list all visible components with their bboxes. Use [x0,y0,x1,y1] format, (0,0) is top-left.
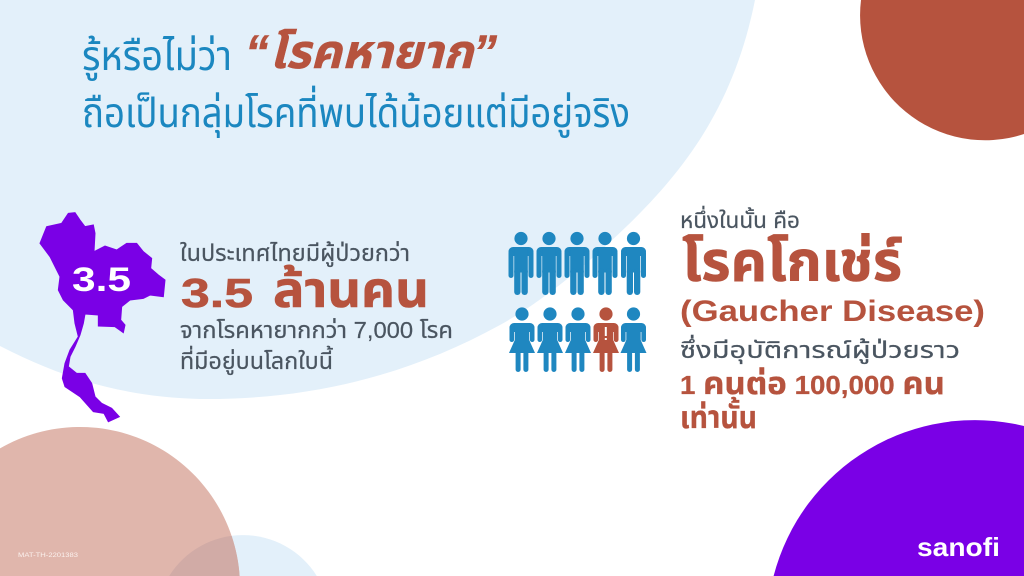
background: purple circle bottom right [774,420,1024,576]
background: pink circle bottom left [0,427,240,576]
text block: Thailand patients: ล้านคน [273,262,429,318]
text block: Gaucher disease: (Gaucher Disease) [680,295,985,328]
text block: Gaucher disease: 1 คนต่อ 100,000 คน [680,366,945,401]
text block: Thailand patients [180,240,453,376]
icon group: people [508,232,646,372]
background: brown circle top right [860,0,1024,140]
text block: Thailand patients: จากโรคหายากกว่า 7,000 โรค [180,317,453,343]
text block: Gaucher disease: เท่านั้น [680,396,757,435]
title line 1: “โรคหายาก” [245,25,498,78]
background: overlap of pink and blue circles [170,536,240,576]
material code: MAT-TH-2201383 [18,552,78,559]
title line 1 [82,25,498,81]
text block: Gaucher disease [680,205,985,435]
text block: Gaucher disease: ซึ่งมีอุบัติการณ์ผู้ป่วยราว [680,334,960,365]
background: large light blue shape [0,0,755,399]
text block: Thailand patients: ในประเทศไทยมีผู้ป่วยกว่า [180,240,410,268]
text block: Thailand patients: ที่มีอยู่บนโลกใบนี้ [180,345,333,376]
title line 1: รู้หรือไม่ว่า [82,33,232,81]
text block: Gaucher disease: โรคโกเช่ร์ [682,230,902,293]
text block: Gaucher disease: หนึ่งในนั้น คือ [680,205,800,233]
background: small light blue circle bottom [169,535,317,576]
title line 2: ถือเป็นกลุ่มโรคที่พบได้น้อยแต่มีอยู่จริง [82,85,630,138]
map of Thailand with figure [40,213,165,422]
map of Thailand with figure: 3.5 [72,261,131,299]
text block: Thailand patients: 3.5 [181,270,253,316]
logo: sanofi: sanofi [917,532,1000,562]
